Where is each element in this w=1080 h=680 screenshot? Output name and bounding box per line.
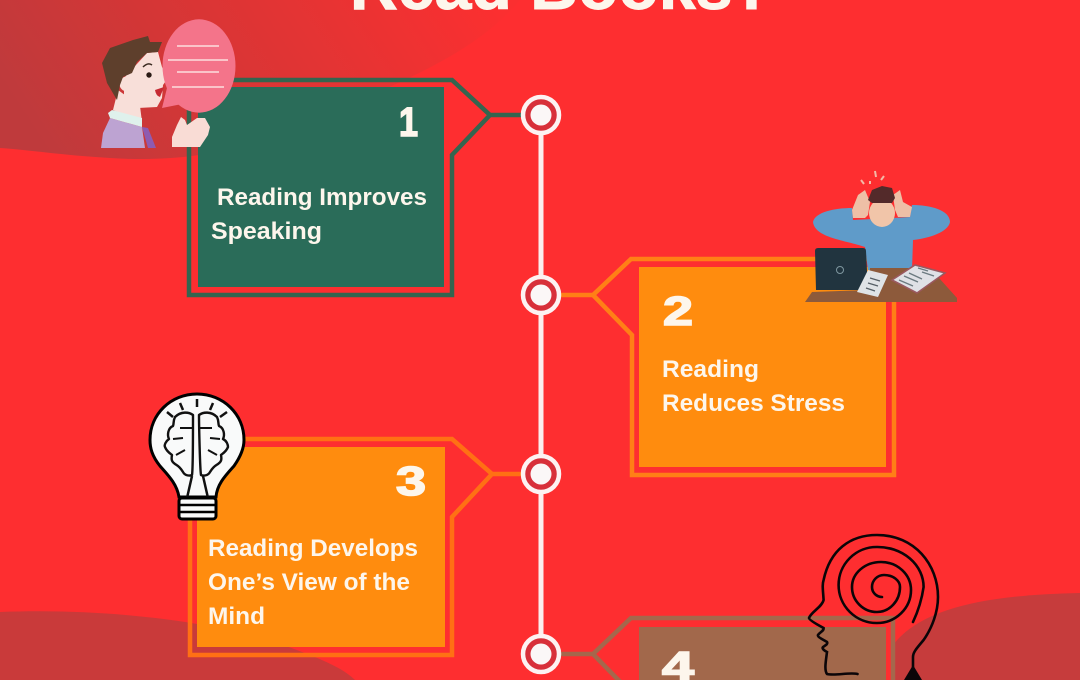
desk [805, 268, 957, 302]
card 1 text: Speaking [211, 218, 322, 245]
papers [857, 270, 888, 297]
panel: card 2 [559, 259, 894, 475]
card 3 connector outline [190, 439, 523, 655]
card 1 text: Reading Improves [217, 184, 427, 211]
background blob: bottom right [893, 593, 1080, 680]
card 4 fill [639, 627, 886, 680]
background blob: bottom left [0, 611, 355, 680]
icon: brain light bulb [150, 394, 244, 519]
card 2 connector outline [559, 259, 894, 475]
card 2 fill [639, 267, 886, 467]
card 1 text [211, 184, 427, 245]
card 3 fill [197, 447, 445, 647]
card 1 fill [198, 87, 444, 287]
background blob: top left [0, 0, 520, 159]
panel: card 3 [190, 439, 523, 655]
card 4 connector outline [559, 618, 893, 680]
card 3 text: Reading Develops [208, 535, 418, 562]
card 1 connector outline [189, 80, 523, 295]
card 2 text: Reading [662, 356, 759, 383]
panel: card 1 [189, 80, 523, 295]
open book [892, 265, 945, 293]
card 1 number: 1 [399, 99, 418, 145]
card 3 text [208, 535, 418, 630]
card 3 text: Mind [208, 603, 265, 630]
card 3 text: One’s View of the [208, 569, 410, 596]
timeline node 3 [523, 456, 559, 492]
panel: card 4 [559, 618, 893, 680]
card 2 text: Reduces Stress [662, 390, 845, 417]
card 2 number: 2 [663, 288, 693, 334]
speech bubble [162, 19, 236, 113]
icon: stressed person at desk [805, 171, 957, 302]
laptop [815, 248, 868, 290]
timeline node 4 [523, 636, 559, 672]
icon: head with spiral [809, 535, 938, 680]
icon: speaking person [101, 19, 236, 148]
card 2 text [662, 356, 845, 417]
timeline node 1 [523, 97, 559, 133]
timeline node 2 [523, 277, 559, 313]
card 3 number: 3 [396, 458, 426, 504]
timeline line [538, 115, 544, 654]
